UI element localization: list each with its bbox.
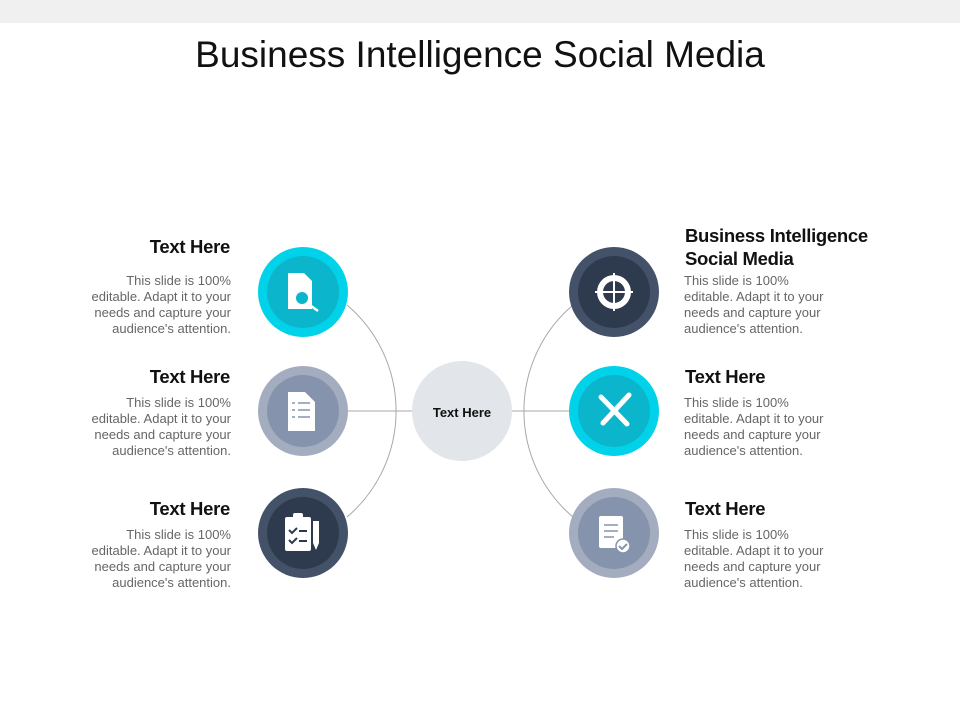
text: left middle: This slide is 100% (126, 395, 231, 410)
text: left top: audience's attention. (112, 321, 231, 336)
text: right bottom: This slide is 100% (684, 527, 789, 542)
text: right bottom: editable. Adapt it to your (684, 543, 824, 558)
text: left bottom: editable. Adapt it to your (92, 543, 232, 558)
text: left middle: needs and capture your (94, 427, 232, 442)
node: right middle (tools) (569, 366, 659, 456)
text: right middle: This slide is 100% (684, 395, 789, 410)
text: right bottom: audience's attention. (684, 575, 803, 590)
text: right top: Business Intelligence (685, 225, 868, 246)
text: left top: Text Here (150, 236, 230, 257)
text: right middle: audience's attention. (684, 443, 803, 458)
text: right top: Social Media (685, 248, 794, 269)
center circle: Text Here (433, 405, 491, 420)
text: right top: audience's attention. (684, 321, 803, 336)
node: left bottom (clipboard pen) (258, 488, 348, 578)
text: left middle: audience's attention. (112, 443, 231, 458)
text: left bottom: This slide is 100% (126, 527, 231, 542)
text: left middle (92, 366, 232, 458)
text: right top: This slide is 100% (684, 273, 789, 288)
text: right middle: editable. Adapt it to your (684, 411, 824, 426)
text: right top (684, 225, 868, 336)
text: right middle (684, 366, 824, 458)
text: right middle: Text Here (685, 366, 765, 387)
text: left bottom: audience's attention. (112, 575, 231, 590)
text: left middle: Text Here (150, 366, 230, 387)
node: right top (target) (569, 247, 659, 337)
text: left bottom: needs and capture your (94, 559, 232, 574)
text: left top: editable. Adapt it to your (92, 289, 232, 304)
text: left top: needs and capture your (94, 305, 232, 320)
text: left bottom (92, 498, 232, 590)
text: right top: needs and capture your (684, 305, 821, 320)
center circle (412, 361, 512, 461)
text: left bottom: Text Here (150, 498, 230, 519)
text: right bottom: needs and capture your (684, 559, 821, 574)
text: right bottom (684, 498, 824, 590)
node: left middle (document list) (258, 366, 348, 456)
text: left middle: editable. Adapt it to your (92, 411, 232, 426)
text: right top: editable. Adapt it to your (684, 289, 824, 304)
text: right middle: needs and capture your (684, 427, 821, 442)
text: left top (92, 236, 232, 336)
text: right bottom: Text Here (685, 498, 765, 519)
node: right bottom (clipboard check) (569, 488, 659, 578)
connectors (346, 305, 573, 517)
top bar (0, 0, 960, 23)
node: left top (document search) (258, 247, 348, 337)
text: left top: This slide is 100% (126, 273, 231, 288)
title: Business Intelligence Social Media (195, 34, 765, 75)
